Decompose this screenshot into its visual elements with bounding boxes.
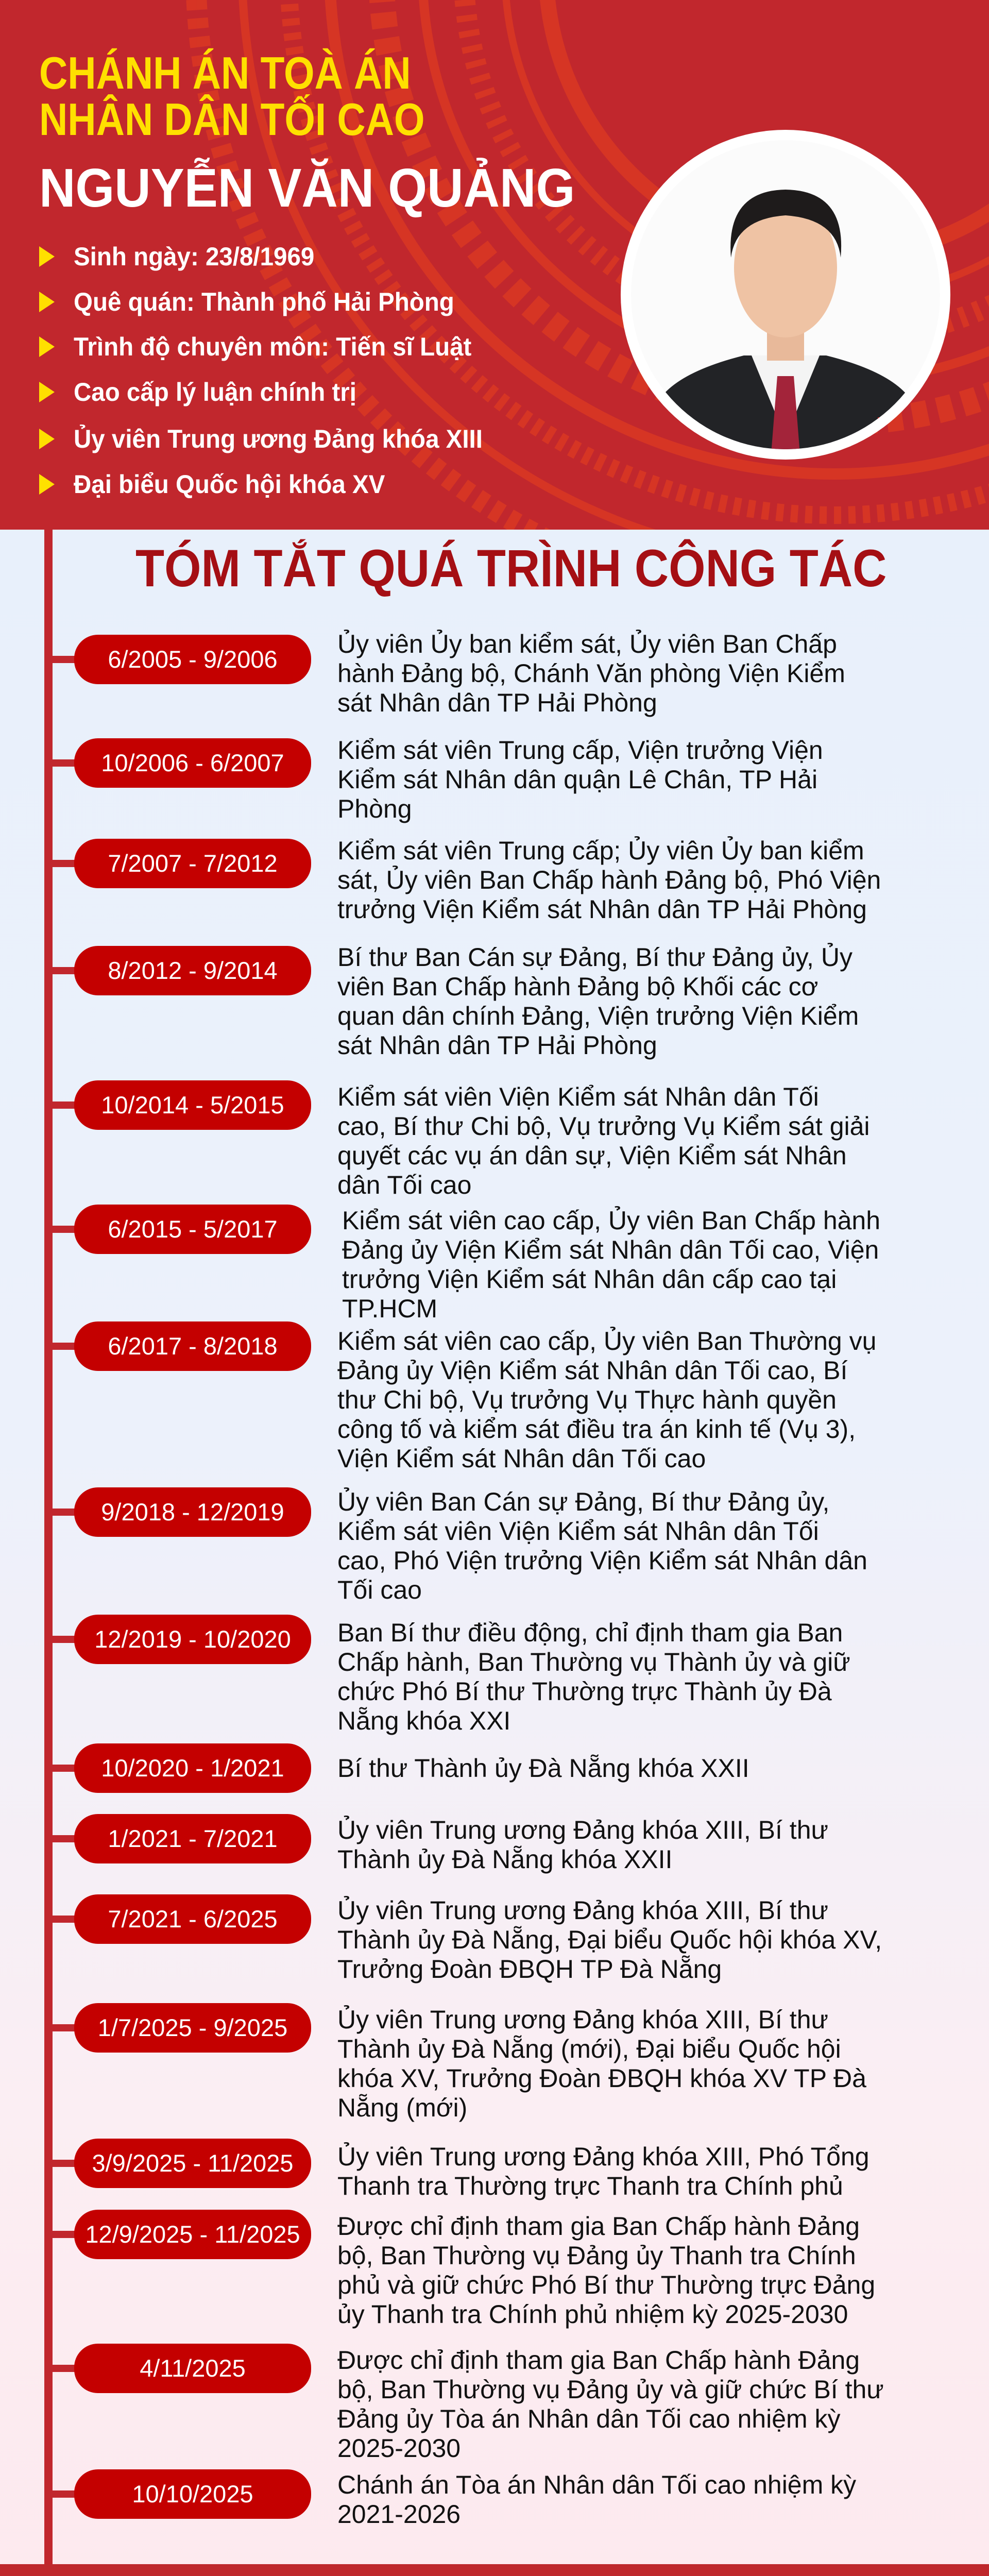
connector 14 [44,2160,75,2167]
pill 2: 10/2006 - 6/2007 [101,749,284,776]
text 7: Viện Kiểm sát Nhân dân Tối cao [337,1444,706,1473]
text 14: Ủy viên Trung ương Đảng khóa XIII, Phó Tổng [337,2142,869,2171]
text 16: Được chỉ định tham gia Ban Chấp hành Đảng [337,2346,860,2375]
text 7: thư Chi bộ, Vụ trưởng Vụ Thực hành quyền [337,1385,837,1414]
title line 2: NHÂN DÂN TỐI CAO [39,94,425,145]
text 9 [337,1618,850,1735]
pill 14 [74,2139,311,2188]
pill 15 [74,2210,311,2259]
text 13 [337,2005,866,2122]
text 5: quyết các vụ án dân sự, Viện Kiểm sát Nhân [337,1141,847,1170]
pill 12: 7/2021 - 6/2025 [108,1905,278,1933]
text 2 [337,736,823,823]
text 8: Tối cao [337,1575,422,1604]
text 17: Chánh án Tòa án Nhân dân Tối cao nhiệm kỳ [337,2470,856,2499]
text 4: Bí thư Ban Cán sự Đảng, Bí thư Đảng ủy, Ủy [337,943,852,972]
text 4 [337,943,859,1060]
text 12: Trưởng Đoàn ĐBQH TP Đà Nẵng [337,1955,722,1984]
text 3: sát, Ủy viên Ban Chấp hành Đảng bộ, Phó Viện [337,866,881,894]
text 9: Chấp hành, Ban Thường vụ Thành ủy và giữ [337,1648,850,1676]
pill 7 [74,1321,311,1371]
text 8: cao, Phó Viện trưởng Viện Kiểm sát Nhân dân [337,1546,867,1575]
text 11: Ủy viên Trung ương Đảng khóa XIII, Bí thư [337,1816,828,1844]
header panel: Trình độ chuyên môn: Tiến sĩ Luật [74,332,471,361]
text 16: Đảng ủy Tòa án Nhân dân Tối cao nhiệm kỳ [337,2404,841,2433]
bullet: central committee [39,425,483,453]
text 7: công tố và kiểm sát điều tra án kinh tế (Vụ 3), [337,1415,856,1444]
pill 9: 12/2019 - 10/2020 [94,1625,291,1653]
connector 2 [44,759,75,767]
text 3: Kiểm sát viên Trung cấp; Ủy viên Ủy ban kiểm [337,836,864,865]
text 11 [337,1816,828,1874]
text 4: sát Nhân dân TP Hải Phòng [337,1031,657,1060]
bullet: hometown [39,287,454,316]
text 6: TP.HCM [342,1294,437,1323]
connector 11 [44,1835,75,1842]
text 12: Ủy viên Trung ương Đảng khóa XIII, Bí thư [337,1896,828,1925]
text 11: Thành ủy Đà Nẵng khóa XXII [337,1845,672,1874]
pill 13 [74,2003,311,2053]
text 12 [337,1896,882,1984]
pill 10: 10/2020 - 1/2021 [101,1754,284,1782]
connector 16 [44,2365,75,2372]
pill 9 [74,1615,311,1664]
text 5: dân Tối cao [337,1171,471,1199]
text 13: khóa XV, Trưởng Đoàn ĐBQH khóa XV TP Đà [337,2064,866,2093]
text 10: Bí thư Thành ủy Đà Nẵng khóa XXII [337,1754,749,1783]
text 3: trưởng Viện Kiểm sát Nhân dân TP Hải Phòng [337,895,867,924]
header panel: Sinh ngày: 23/8/1969 [74,242,314,271]
pill 11 [74,1814,311,1863]
text 9: Nẵng khóa XXI [337,1706,510,1735]
name: NGUYỄN VĂN QUẢNG [39,158,575,218]
pill 16: 4/11/2025 [140,2354,246,2382]
text 1 [337,630,845,717]
text 6 [342,1206,880,1323]
text 16: bộ, Ban Thường vụ Đảng ủy và giữ chức Bí thư [337,2375,884,2404]
text 7 [337,1327,876,1473]
text 5: Kiểm sát viên Viện Kiểm sát Nhân dân Tối [337,1082,819,1111]
text 17: 2021-2026 [337,2500,461,2529]
header panel: Đại biểu Quốc hội khóa XV [74,470,385,499]
connector 5 [44,1101,75,1109]
connector 6 [44,1226,75,1233]
text 6: trưởng Viện Kiểm sát Nhân dân cấp cao tại [342,1265,837,1294]
text 6: Đảng ủy Viện Kiểm sát Nhân dân Tối cao, Viện [342,1235,879,1264]
text 9: chức Phó Bí thư Thường trực Thành ủy Đà [337,1677,832,1706]
pill 16 [74,2344,311,2393]
text 12: Thành ủy Đà Nẵng, Đại biểu Quốc hội khóa XV, [337,1925,882,1954]
decorative drum pattern [186,0,989,530]
pill 12 [74,1894,311,1944]
pill 15: 12/9/2025 - 11/2025 [85,2221,300,2248]
text 1: Ủy viên Ủy ban kiểm sát, Ủy viên Ban Chấp [337,630,837,658]
connector 3 [44,860,75,867]
text 15: Được chỉ định tham gia Ban Chấp hành Đảng [337,2212,860,2241]
text 2: Kiểm sát Nhân dân quận Lê Chân, TP Hải [337,765,817,794]
pill 7: 6/2017 - 8/2018 [108,1332,278,1360]
footer [0,2564,989,2576]
connector 10 [44,1765,75,1772]
text 3 [337,836,881,924]
pill 14: 3/9/2025 - 11/2025 [92,2149,294,2177]
text 8: Kiểm sát viên Viện Kiểm sát Nhân dân Tối [337,1517,819,1546]
text 8: Ủy viên Ban Cán sự Đảng, Bí thư Đảng ủy, [337,1487,829,1516]
pill 3 [74,839,311,888]
bullet: national assembly [39,470,385,499]
portrait photo [621,130,950,460]
connector 15 [44,2231,75,2238]
connector 7 [44,1343,75,1350]
section heading: TÓM TẮT QUÁ TRÌNH CÔNG TÁC [135,539,886,598]
pill 11: 1/2021 - 7/2021 [108,1825,278,1852]
header panel [0,0,989,530]
text 17 [337,2470,856,2529]
pill 5 [74,1080,311,1130]
title line 1: CHÁNH ÁN TOÀ ÁN [39,47,411,98]
text 7: Kiểm sát viên cao cấp, Ủy viên Ban Thường vụ [337,1327,876,1355]
text 15: phủ và giữ chức Phó Bí thư Thường trực Đảng [337,2270,875,2299]
connector 12 [44,1916,75,1923]
text 7: Đảng ủy Viện Kiểm sát Nhân dân Tối cao, Bí [337,1356,847,1385]
text 8 [337,1487,867,1604]
pill 4: 8/2012 - 9/2014 [108,957,278,984]
header panel: Ủy viên Trung ương Đảng khóa XIII [74,425,483,453]
header panel: Cao cấp lý luận chính trị [74,378,356,406]
pill 8: 9/2018 - 12/2019 [101,1498,284,1526]
pill 4 [74,946,311,995]
text 15: bộ, Ban Thường vụ Đảng ủy Thanh tra Chính [337,2241,856,2270]
text 15 [337,2212,875,2329]
pill 17: 10/10/2025 [132,2480,253,2507]
pill 1 [74,635,311,684]
text 16: 2025-2030 [337,2434,461,2463]
text 16 [337,2346,884,2463]
text 13: Thành ủy Đà Nẵng (mới), Đại biểu Quốc hội [337,2035,841,2063]
header panel: Quê quán: Thành phố Hải Phòng [74,287,454,316]
text 14: Thanh tra Thường trực Thanh tra Chính phủ [337,2172,843,2200]
connector 17 [44,2490,75,2498]
text 1: sát Nhân dân TP Hải Phòng [337,688,657,717]
connector 8 [44,1509,75,1516]
bullet: birth [39,242,314,271]
pill 6 [74,1205,311,1254]
pill 10 [74,1743,311,1793]
text 13: Nẵng (mới) [337,2093,467,2122]
pill 17 [74,2469,311,2519]
text 2: Kiểm sát viên Trung cấp, Viện trưởng Viện [337,736,823,765]
pill 6: 6/2015 - 5/2017 [108,1215,278,1243]
pill 3: 7/2007 - 7/2012 [108,850,278,877]
text 5 [337,1082,870,1199]
connector 4 [44,967,75,974]
text 6: Kiểm sát viên cao cấp, Ủy viên Ban Chấp hành [342,1206,880,1235]
bullet: education [39,332,471,361]
text 2: Phòng [337,794,412,823]
connector 9 [44,1636,75,1643]
pill 5: 10/2014 - 5/2015 [101,1091,284,1118]
pill 8 [74,1487,311,1537]
connector 1 [44,656,75,663]
pill 2 [74,738,311,788]
text 14 [337,2142,869,2200]
text 4: viên Ban Chấp hành Đảng bộ Khối các cơ [337,972,818,1001]
text 15: ủy Thanh tra Chính phủ nhiệm kỳ 2025-2030 [337,2300,848,2329]
text 1: hành Đảng bộ, Chánh Văn phòng Viện Kiểm [337,659,845,688]
text 5: cao, Bí thư Chi bộ, Vụ trưởng Vụ Kiểm sát giải [337,1112,870,1141]
pill 13: 1/7/2025 - 9/2025 [98,2014,287,2041]
text 9: Ban Bí thư điều động, chỉ định tham gia Ban [337,1618,843,1647]
text 4: quan dân chính Đảng, Viện trưởng Viện Kiểm [337,1002,859,1030]
pill 1: 6/2005 - 9/2006 [108,646,278,673]
connector 13 [44,2024,75,2031]
text 13: Ủy viên Trung ương Đảng khóa XIII, Bí thư [337,2005,828,2034]
bullet: politics [39,378,356,406]
timeline vertical line [44,530,53,2565]
